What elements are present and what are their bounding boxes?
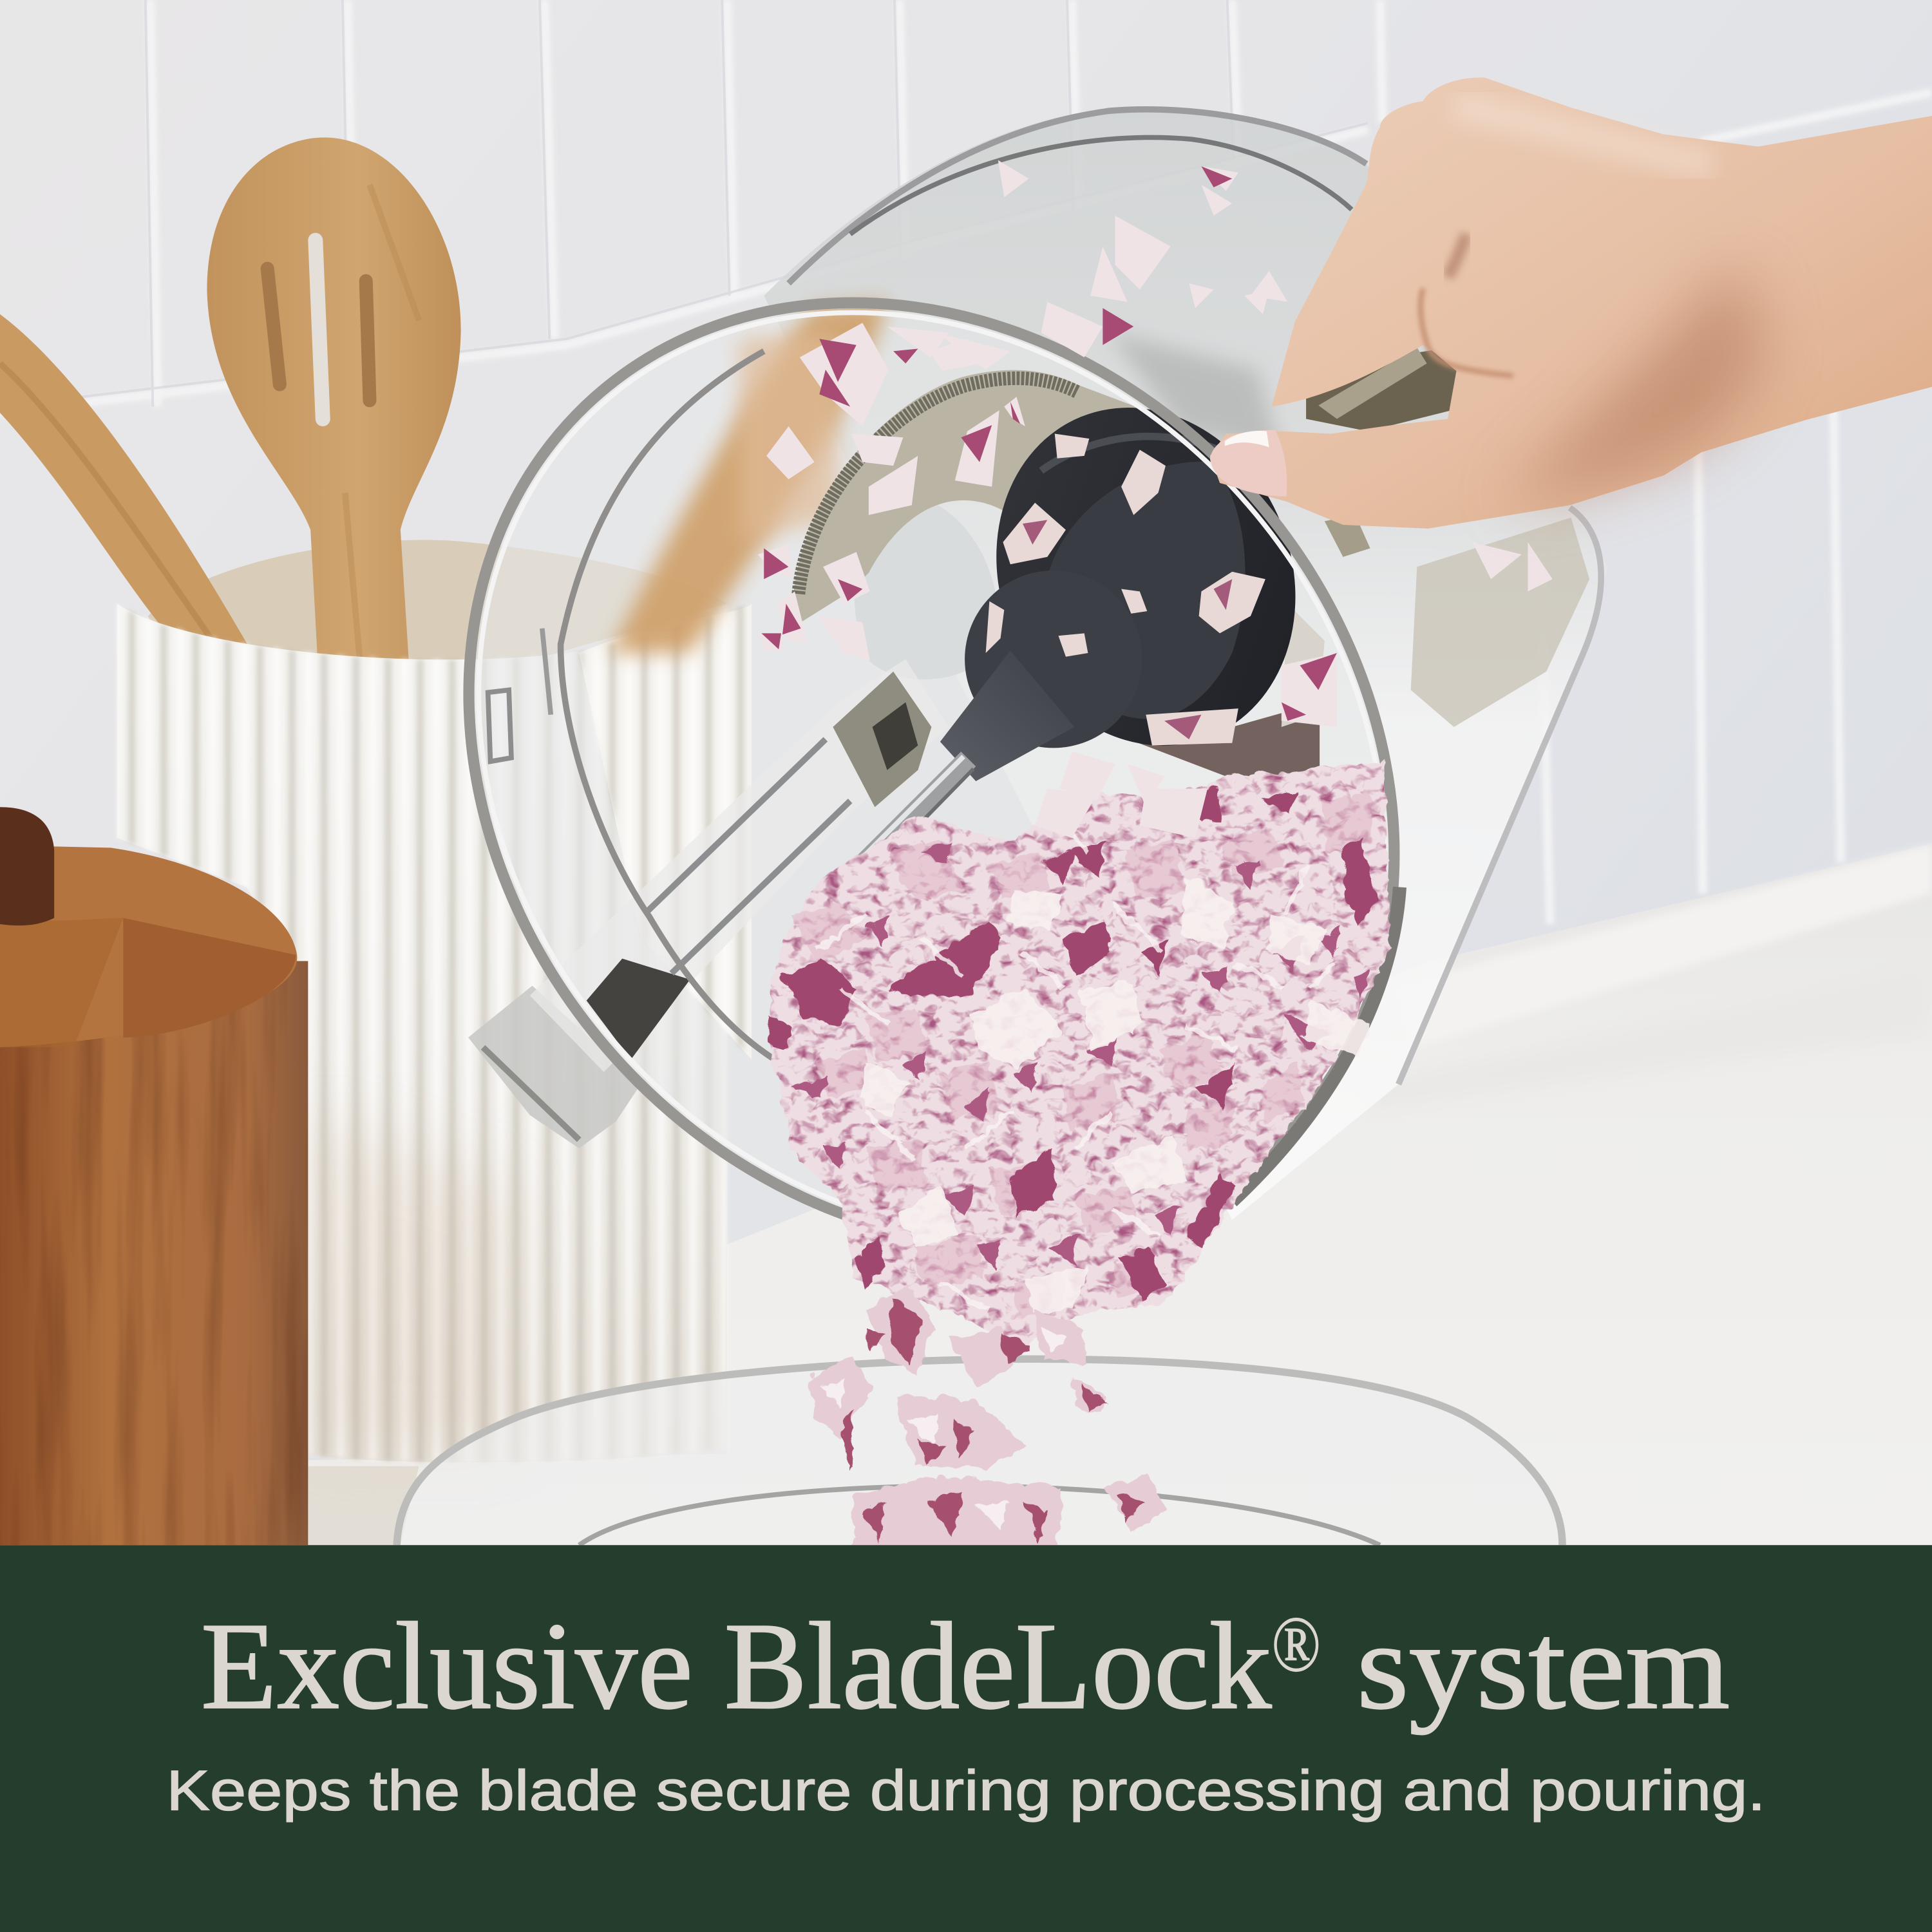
food processor front rim: [278, 114, 1586, 1434]
ribbed ceramic utensil cup: [117, 604, 727, 1463]
headline: ®: [1271, 1601, 1321, 1688]
ribbed hub column: [1047, 462, 1245, 719]
food processor bowl body: [764, 107, 1608, 1220]
onion chop edges: [813, 813, 1331, 1306]
falling onion pieces: [807, 1282, 1164, 1553]
bowl interior seen through glass: [278, 114, 1586, 1434]
scattered onion pieces on blade and bowl wall: [758, 160, 1553, 838]
slotted wooden spoon: [207, 137, 461, 665]
wooden spatula: [0, 314, 254, 656]
thumbnail: [1210, 430, 1287, 497]
spindle cap: [965, 571, 1142, 748]
bowl handle grip: [1306, 345, 1466, 557]
hand gripping bowl: [1210, 77, 1932, 529]
bottom banner: [0, 1545, 1932, 1932]
pale onion pieces: [857, 875, 1368, 1312]
onion bits on hub: [986, 433, 1265, 746]
headline: Exclusive BladeLock: [201, 1597, 1272, 1735]
ceramic cup back rim: [148, 540, 727, 672]
headline: system: [1357, 1597, 1730, 1735]
locking handle and latch: [468, 629, 949, 1148]
metal pin: [855, 759, 969, 873]
tiled wall: [82, 0, 1932, 954]
spindle cone: [940, 650, 1074, 781]
chopped red onion pile: [764, 758, 1386, 1345]
headline: [201, 1597, 1730, 1735]
blade hub and spindle: [850, 362, 1345, 880]
mid pink onion pieces: [788, 788, 1368, 1318]
wooden canister: [0, 807, 308, 1545]
stainless blade: [793, 370, 1325, 779]
countertop: [308, 844, 1932, 1545]
subheading: Keeps the blade secure during processing and pouring.: [166, 1759, 1766, 1823]
hand shadow: [1503, 265, 1763, 503]
dark onion pieces: [764, 782, 1374, 1300]
dark hub base: [947, 362, 1345, 791]
glass mixing bowl: [397, 1359, 1562, 1545]
